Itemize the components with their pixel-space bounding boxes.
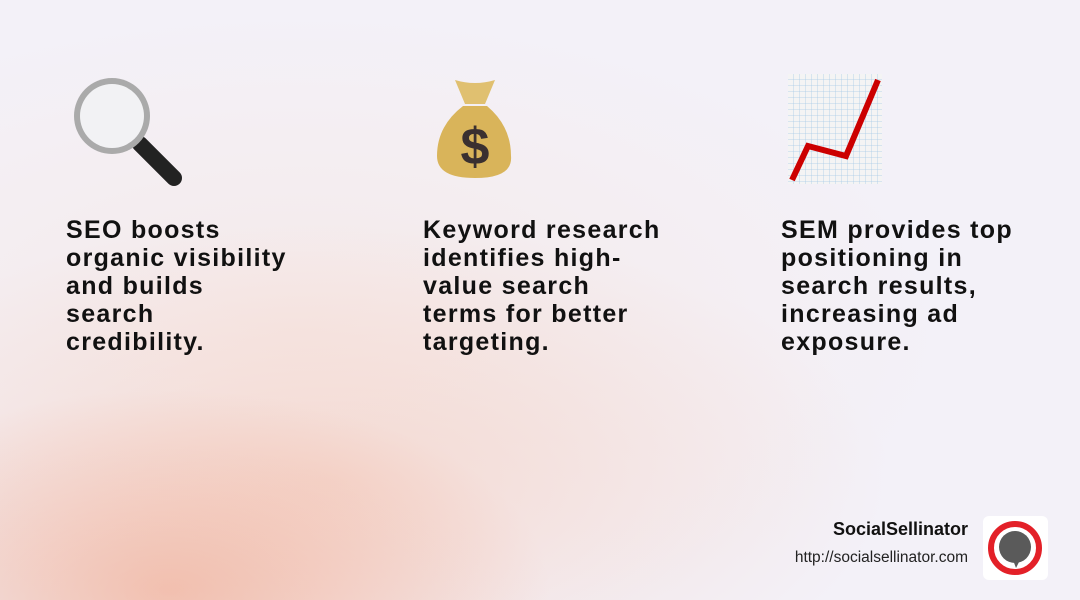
text: SEO: credibility. — [66, 328, 205, 356]
icon: magnifying glass — [74, 78, 182, 186]
text: SEM: positioning in — [781, 244, 963, 272]
text: SEO — [66, 216, 287, 356]
logo — [983, 516, 1048, 580]
text: SEO: SEO boosts — [66, 216, 221, 244]
text: SEO: and builds — [66, 272, 204, 300]
text: SEM: increasing ad — [781, 300, 959, 328]
icon: money bag — [437, 80, 512, 178]
text: SEO: organic visibility — [66, 244, 287, 272]
text: SEO: search — [66, 300, 154, 328]
text: keyword research — [423, 216, 661, 356]
text: SEM: SEM provides top — [781, 216, 1013, 244]
text: keyword research: value search — [423, 272, 590, 300]
text: keyword research: terms for better — [423, 300, 629, 328]
text: keyword research: identifies high- — [423, 244, 622, 272]
text: keyword research: Keyword research — [423, 216, 661, 244]
text: SEM — [781, 216, 1013, 356]
brand url: http://socialsellinator.com — [795, 549, 968, 566]
text: SEM: exposure. — [781, 328, 911, 356]
text: keyword research: targeting. — [423, 328, 550, 356]
brand name: SocialSellinator — [833, 519, 968, 539]
icon: money bag: $ — [461, 118, 490, 176]
icon: chart increasing — [788, 74, 882, 184]
text: SEM: search results, — [781, 272, 977, 300]
